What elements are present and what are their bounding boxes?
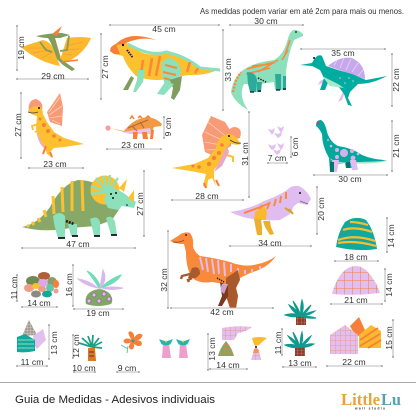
measure: 20 cm: 20 cm — [316, 197, 326, 221]
measure: teal brachiosaurus 21 cm — [391, 121, 401, 171]
measure: spinosaurus 22 cm — [391, 54, 401, 106]
measure: 22 cm — [327, 357, 382, 367]
measure: 22 cm: 22 cm — [342, 357, 366, 367]
measure: 34 cm — [230, 238, 311, 248]
measure: small dilophosaurus 23 cm: 23 cm — [43, 159, 67, 169]
measure: 15 cm — [384, 320, 394, 357]
measure: hill 14 cm: 14 cm — [386, 224, 396, 248]
dinosaur: teal brachiosaurus — [316, 120, 387, 172]
measure: 29 cm: 29 cm — [41, 71, 65, 81]
measure: 19 cm — [16, 26, 26, 70]
measure: palm 11 cm: 11 cm — [273, 332, 283, 354]
measure: 29 cm — [17, 71, 88, 81]
measure: 31 cm: 31 cm — [240, 142, 250, 166]
palm: small tree — [79, 335, 102, 361]
dinosaur: pterodactyl — [21, 26, 91, 71]
dinosaur: t-rex — [230, 186, 311, 235]
volcano group — [218, 326, 267, 360]
logo: Little Lu wall studio — [341, 390, 401, 410]
measure: 33 cm — [223, 30, 233, 110]
measure: hill trio 13 cm: 13 cm — [49, 331, 59, 355]
measure: large dilophosaurus 28 cm — [172, 191, 243, 201]
measure: 32 cm — [159, 231, 169, 308]
measure: teal brachiosaurus 30 cm — [314, 174, 387, 184]
measure: parasaurolophus 27 cm — [100, 34, 110, 99]
logo: Little Lu wall studio: Little — [341, 390, 380, 409]
measure: flower 9 cm: 9 cm — [118, 363, 136, 373]
measure: hill trio 11 cm: 11 cm — [21, 357, 43, 367]
measure: 35 cm: 35 cm — [331, 48, 355, 58]
measure: footprints 7 cm: 7 cm — [268, 153, 286, 163]
hill: teal striped — [336, 218, 377, 250]
rocks: hill trio — [17, 320, 46, 352]
measure: 9 cm: 9 cm — [163, 118, 173, 136]
flower — [121, 332, 142, 353]
measure: 20 cm — [316, 187, 326, 234]
dinosaur: triceratops — [22, 175, 136, 238]
rocks: colourful pile — [24, 272, 59, 298]
logo: Little Lu wall studio: wall studio — [354, 406, 385, 410]
measure: rocks 14 cm: 14 cm — [27, 298, 51, 308]
measure: 18 cm — [335, 252, 378, 262]
dinosaur: ankylosaurus — [105, 116, 162, 139]
footprints — [268, 126, 284, 155]
measure: plant 16 cm: 16 cm — [64, 273, 74, 297]
measure: small dilophosaurus 23 cm — [29, 159, 83, 169]
measure: 18 cm: 18 cm — [344, 252, 368, 262]
measure: plant 19 cm — [74, 308, 123, 318]
footer divider — [0, 382, 416, 384]
measure: plant 19 cm: 19 cm — [86, 308, 110, 318]
logo: Little Lu wall studio: Lu — [381, 390, 401, 409]
dinosaur: orange hadrosaur — [170, 232, 276, 308]
measure: hill 2 14 cm: 14 cm — [384, 273, 394, 297]
measure: 19 cm: 19 cm — [16, 36, 26, 60]
measure: 34 cm: 34 cm — [258, 238, 282, 248]
measure: 42 cm — [171, 307, 273, 317]
dinosaur: mint brachiosaurus — [231, 30, 303, 110]
measure: teal brachiosaurus 21 cm: 21 cm — [391, 134, 401, 158]
measure: spinosaurus 22 cm: 22 cm — [391, 68, 401, 92]
measure: parasaurolophus 27 cm: 27 cm — [100, 55, 110, 79]
measure: volcano 14 cm — [210, 360, 247, 370]
note: measurement tolerance: As medidas podem variar em até 2cm para mais ou menos. — [200, 7, 404, 16]
dinosaur: parasaurolophus — [110, 36, 220, 100]
dinosaur: spinosaurus — [300, 55, 387, 106]
dinosaur: small dilophosaurus — [28, 93, 84, 158]
measure: large dilophosaurus 28 cm: 28 cm — [195, 191, 219, 201]
measure: triceratops 27 cm: 27 cm — [135, 192, 145, 216]
measure: ankylosaurus 23 cm — [107, 140, 161, 150]
measure: volcano 13 cm — [207, 334, 217, 370]
palm: bottom fern — [285, 332, 314, 356]
palm: top fern — [285, 300, 316, 325]
measure: 35 cm — [301, 48, 385, 58]
measure: mint brachiosaurus 30 cm — [230, 16, 303, 26]
measure: 32 cm: 32 cm — [159, 268, 169, 292]
measure: hill trio 13 cm — [49, 325, 59, 359]
measure: 33 cm: 33 cm — [223, 58, 233, 82]
measure: palm 13 cm: 13 cm — [288, 358, 312, 368]
measure: mint brachiosaurus 30 cm: 30 cm — [254, 16, 278, 26]
hill: lilac grid — [332, 266, 380, 295]
measure: plant 16 cm — [64, 265, 74, 306]
measure: hill 2 21 cm: 21 cm — [344, 295, 368, 305]
footer title: Guia de Medidas - Adesivos individuais — [15, 394, 216, 406]
measure: footprints 6 cm: 6 cm — [290, 138, 300, 156]
measure: 47 cm — [22, 239, 135, 249]
dinosaur: large dilophosaurus — [172, 116, 241, 188]
measure: hill 2 21 cm — [331, 295, 382, 305]
measure: triceratops 27 cm — [135, 171, 145, 236]
measure: 42 cm: 42 cm — [210, 307, 234, 317]
measure: rocks 11 cm: 11 cm — [9, 277, 19, 299]
measure: rocks 14 cm — [22, 298, 57, 308]
measure: volcano 13 cm: 13 cm — [207, 337, 217, 361]
measure: ankylosaurus 23 cm: 23 cm — [121, 140, 145, 150]
rocks: house shapes — [330, 317, 381, 354]
plant: green pot with leaves — [78, 270, 123, 306]
measure: volcano 14 cm: 14 cm — [216, 360, 240, 370]
measure: 12 cm: 12 cm — [71, 334, 81, 358]
measure: hill 14 cm — [386, 218, 396, 252]
cactus pair — [160, 340, 189, 358]
measure: 10 cm: 10 cm — [72, 363, 96, 373]
measure: small dilophosaurus 27 cm: 27 cm — [13, 113, 23, 137]
measure: 45 cm: 45 cm — [152, 24, 176, 34]
measure: 47 cm: 47 cm — [66, 239, 90, 249]
measure: 15 cm: 15 cm — [384, 326, 394, 350]
measure: teal brachiosaurus 30 cm: 30 cm — [338, 174, 362, 184]
measure: 45 cm — [110, 24, 219, 34]
measure: 31 cm — [240, 112, 250, 197]
measure: small dilophosaurus 27 cm — [13, 93, 23, 158]
